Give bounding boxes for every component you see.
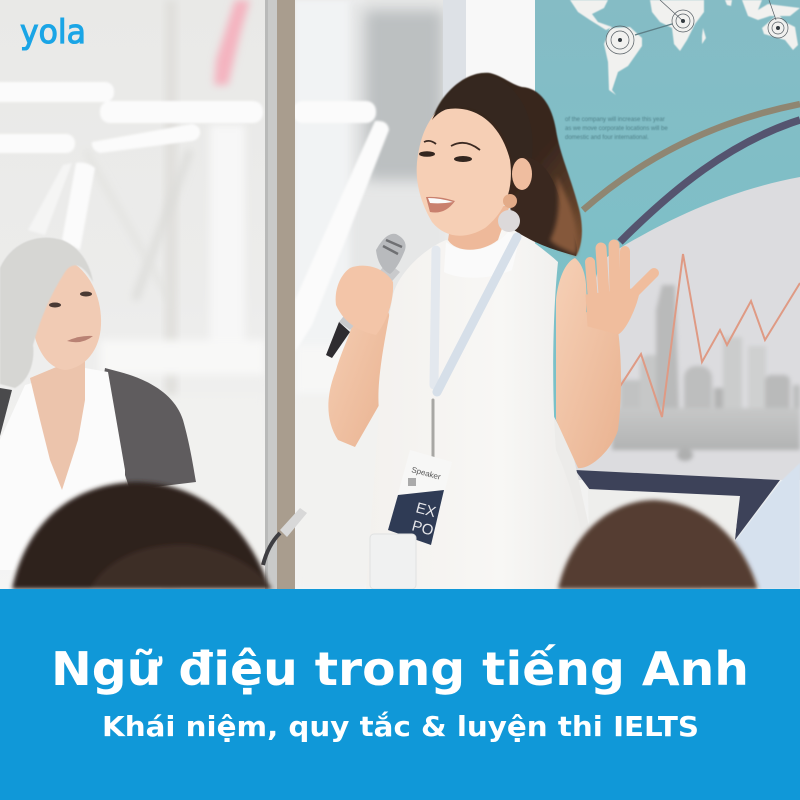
silver hair xyxy=(0,238,93,388)
microphone xyxy=(326,234,406,358)
ceiling light bars xyxy=(0,82,389,352)
hair tips highlight xyxy=(550,175,577,255)
speaker badge: PO xyxy=(410,517,435,539)
hair over forehead xyxy=(432,76,533,170)
brown arc xyxy=(583,104,800,210)
white blouse xyxy=(0,368,125,570)
map target markers xyxy=(606,0,788,54)
jacket xyxy=(100,368,196,490)
blurred room background xyxy=(0,0,800,589)
face xyxy=(33,262,101,370)
neck and chest xyxy=(30,355,85,490)
hair behind ear xyxy=(508,157,577,256)
left arm xyxy=(328,275,392,447)
subtitle: Khái niệm, quy tắc & luyện thi IELTS xyxy=(102,710,699,743)
speaker woman xyxy=(326,73,654,589)
white sleeveless top xyxy=(366,225,592,589)
salmon line chart xyxy=(619,254,800,417)
lower torso behind arm xyxy=(545,400,592,589)
glass door column xyxy=(265,0,295,589)
eyes xyxy=(419,151,472,162)
fist holding microphone xyxy=(326,234,406,358)
person on the right: blue shirt xyxy=(735,463,800,589)
foreground heads xyxy=(12,482,758,589)
logo: yola: yola xyxy=(20,12,86,51)
title: Ngữ điệu trong tiếng Anh xyxy=(51,642,749,696)
seated woman with grey hair xyxy=(0,238,196,570)
speaker badge xyxy=(388,450,452,545)
speaker badge: EX xyxy=(414,499,438,521)
right arm (raised) xyxy=(556,258,621,468)
grey city skyline xyxy=(612,285,800,461)
eyebrows xyxy=(424,141,480,150)
poster body text xyxy=(565,117,668,141)
lower white swoosh xyxy=(545,177,800,480)
mouth xyxy=(426,197,455,213)
raised hand xyxy=(586,245,654,334)
table microphone xyxy=(263,508,307,565)
blue title banner xyxy=(0,589,800,800)
speaker badge: Speaker xyxy=(410,465,442,482)
photo: speaker at a conference xyxy=(0,0,800,589)
drinking glass xyxy=(370,534,416,589)
wall poster with world map and chart xyxy=(535,0,800,480)
earring xyxy=(498,194,520,232)
poster body text: of the company will increase this year xyxy=(565,117,665,123)
neck xyxy=(448,205,510,250)
purple arc xyxy=(620,120,800,242)
eyes and mouth xyxy=(49,292,93,342)
map continents xyxy=(570,0,800,95)
face xyxy=(417,109,511,236)
ponytail and hair xyxy=(433,73,582,256)
poster body text: domestic and four international. xyxy=(565,135,649,141)
ear xyxy=(512,158,532,190)
high collar xyxy=(444,232,520,278)
navy table and laptop xyxy=(575,470,780,589)
lanyard xyxy=(433,237,517,460)
poster body text: as we move corporate locations will be xyxy=(565,126,668,132)
